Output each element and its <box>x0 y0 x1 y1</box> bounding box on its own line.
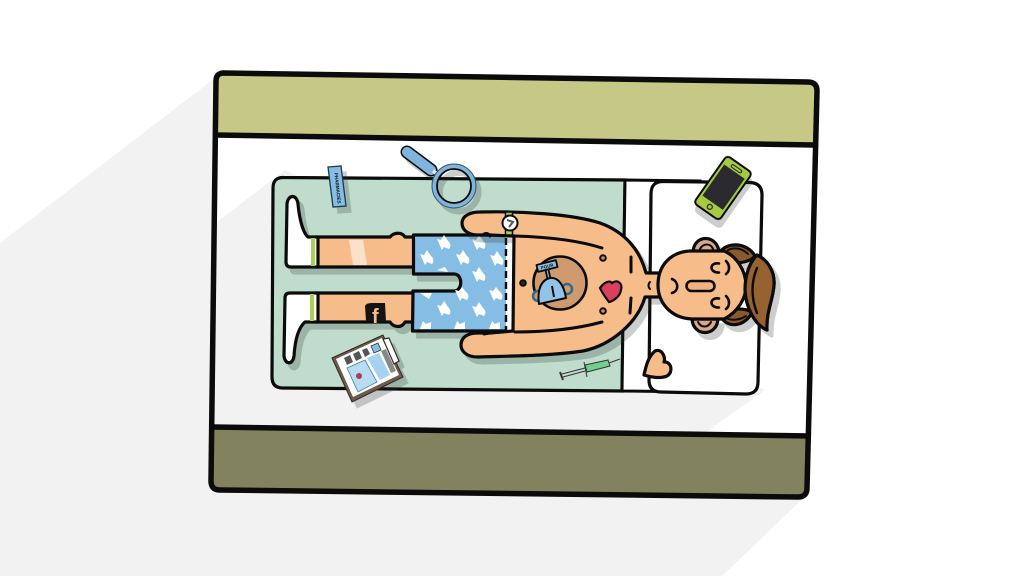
magnifier ring <box>434 166 474 206</box>
phone button <box>706 203 713 210</box>
tattoo: facebook <box>365 303 386 328</box>
hair lines <box>752 268 757 313</box>
bell handles <box>533 291 543 301</box>
panel: mattress <box>212 136 814 434</box>
bell stem <box>545 267 550 279</box>
lower sock <box>284 293 318 363</box>
chin <box>672 279 677 293</box>
panel: headboard band <box>214 73 817 146</box>
legs <box>284 196 414 363</box>
clipboard paper <box>336 338 399 397</box>
toy: blue bell <box>533 260 572 304</box>
body <box>461 212 662 357</box>
waistband <box>506 236 513 330</box>
mouth <box>686 281 714 291</box>
heart organ <box>600 281 621 302</box>
magnifier <box>407 152 476 208</box>
tattoo: facebook: f <box>372 306 379 328</box>
upper sock <box>286 196 318 267</box>
ears and hair <box>692 238 774 332</box>
head <box>658 251 746 319</box>
bed <box>210 73 817 497</box>
sock stripe upper <box>311 238 315 266</box>
clip <box>383 338 399 364</box>
hair swoosh <box>745 255 774 330</box>
medicine label: PHARMACIES <box>334 173 342 204</box>
bandage <box>349 240 367 265</box>
magnifier handle <box>407 152 431 170</box>
text lines <box>381 349 396 373</box>
magnifier neck <box>433 171 439 175</box>
lower leg <box>316 293 414 326</box>
sheet fold <box>622 180 700 392</box>
chart panel <box>347 360 377 392</box>
navel <box>520 280 526 286</box>
pillow <box>649 181 762 394</box>
shorts pattern <box>420 235 503 329</box>
bell tag: POUR <box>540 262 555 270</box>
eyes <box>712 263 719 273</box>
ear inner lines <box>700 244 713 249</box>
phone speaker <box>731 164 742 173</box>
icons row <box>344 355 353 365</box>
chest cavity <box>534 256 586 310</box>
nipple upper <box>600 255 606 261</box>
blue report strip <box>367 353 390 380</box>
upper leg <box>316 233 414 267</box>
panel: sheet <box>272 177 700 392</box>
sock stripe lower <box>310 294 314 321</box>
bell body <box>538 278 566 304</box>
hair top tuft <box>720 245 755 263</box>
bed outline <box>211 73 817 497</box>
clipboard <box>332 335 403 402</box>
shorts <box>412 235 513 331</box>
medicine label <box>328 166 346 207</box>
watch <box>502 212 518 235</box>
phone screen <box>702 164 745 210</box>
background shadow <box>0 78 812 576</box>
hair bottom tuft <box>720 309 752 325</box>
nipple lower <box>600 308 606 314</box>
re-drawn hair front <box>745 255 774 330</box>
hand-shaped heart <box>644 350 671 378</box>
mattress shadow <box>212 170 765 433</box>
blood drop <box>356 373 362 379</box>
head group <box>658 238 774 332</box>
body details <box>484 234 650 334</box>
panel: footboard band <box>210 427 809 497</box>
ear upper <box>693 238 719 252</box>
ear lower <box>692 319 718 332</box>
phone <box>694 155 752 221</box>
syringe <box>560 359 620 380</box>
